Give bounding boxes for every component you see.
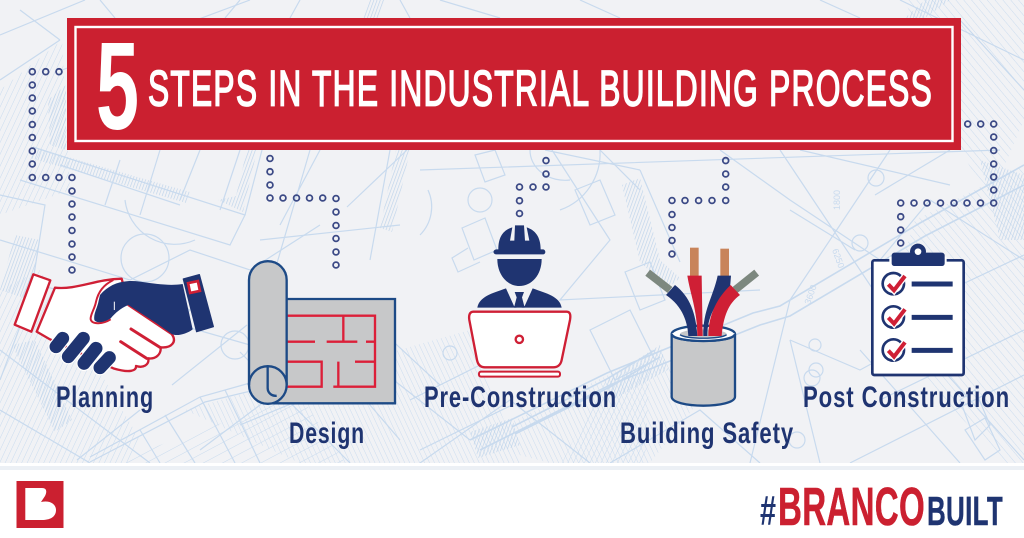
icon: blueprint bbox=[249, 261, 395, 404]
panel: white footer bbox=[0, 470, 1024, 538]
background: blueprint: 3600 bbox=[802, 283, 819, 306]
hashtag: #BRANCOBUILT: # bbox=[760, 487, 776, 534]
dotted path 4 bbox=[669, 158, 729, 257]
icon: checklist clipboard bbox=[872, 244, 964, 375]
background: blueprint: 6250 bbox=[830, 247, 846, 270]
icon: handshake bbox=[15, 274, 213, 371]
label: Pre-Construction: Pre-Construction bbox=[424, 381, 617, 414]
icon: worker with laptop bbox=[469, 225, 570, 377]
dotted path 5 bbox=[898, 121, 997, 246]
dotted path 1 bbox=[29, 69, 75, 273]
label: Design: Design bbox=[289, 417, 365, 450]
title numeral: 5 bbox=[96, 18, 139, 156]
dotted path 3 bbox=[517, 158, 549, 216]
label: Planning: Planning bbox=[56, 381, 154, 414]
dotted path 2 bbox=[267, 156, 339, 268]
hashtag: #BRANCOBUILT: BRANCO bbox=[778, 477, 925, 537]
label: Building Safety: Building Safety bbox=[620, 417, 794, 450]
background: blueprint: 1800 bbox=[832, 190, 842, 210]
title banner bbox=[67, 18, 961, 156]
icon: cables in conduit bbox=[648, 248, 757, 406]
logo: Branco B bbox=[16, 481, 64, 528]
